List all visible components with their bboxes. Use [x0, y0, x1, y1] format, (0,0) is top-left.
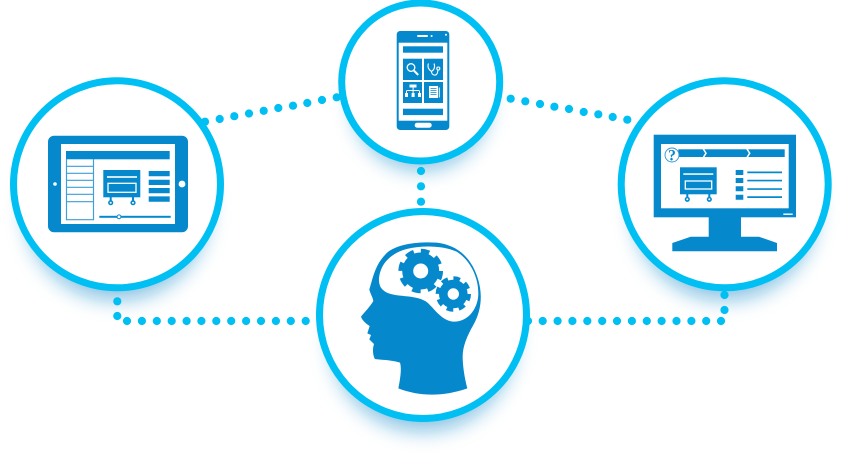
- icon: smartphone: [397, 31, 449, 130]
- connector: head to monitor: [524, 291, 729, 325]
- ring: tablet: [14, 81, 220, 288]
- panel: head circle: [320, 212, 526, 418]
- ring: head: [320, 212, 526, 418]
- icon: magnifier: [407, 64, 418, 75]
- panel: monitor circle: [621, 81, 828, 288]
- icon: small gear: [438, 278, 469, 310]
- icon: desktop monitor: [654, 135, 796, 251]
- icon: tablet: [48, 136, 188, 232]
- connector: tablet to phone: [201, 93, 341, 126]
- ring: phone: [342, 3, 500, 161]
- icon: documents: [429, 86, 439, 98]
- help badge: ?: [668, 148, 676, 164]
- ring: monitor: [621, 81, 828, 288]
- icon: stethoscope: [428, 64, 440, 75]
- icon: hierarchy: [405, 84, 421, 97]
- help badge: [665, 148, 679, 164]
- connector: tablet to head: [113, 297, 310, 325]
- panel: tablet circle: [14, 81, 220, 288]
- icon: head silhouette: [361, 242, 481, 395]
- connector: phone to monitor: [507, 95, 631, 124]
- connector: phone to head: [417, 167, 425, 206]
- panel: phone circle: [342, 3, 500, 161]
- icon: large gear: [401, 251, 441, 291]
